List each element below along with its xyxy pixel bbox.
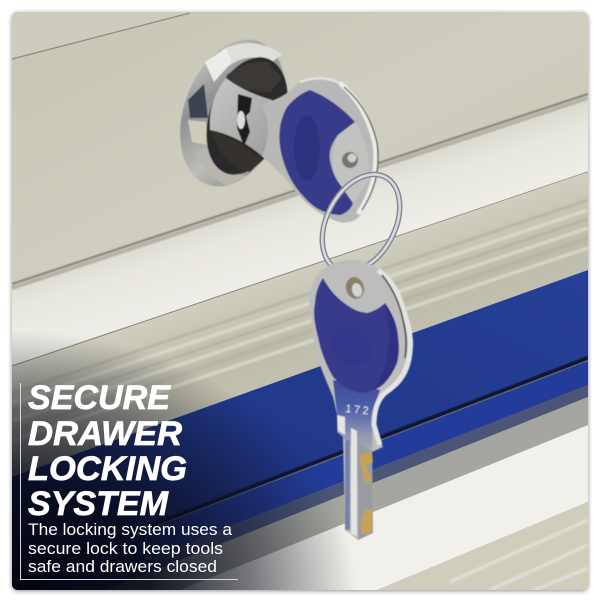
- description: [28, 521, 233, 576]
- description: safe and drawers closed: [28, 558, 217, 576]
- upper drawer front: [12, 12, 588, 302]
- dark text backdrop: [12, 330, 357, 590]
- ridged handle band: [12, 172, 588, 480]
- drawer white rail: [12, 94, 588, 368]
- lock cylinder: [161, 25, 305, 201]
- key on the lock: [262, 78, 379, 223]
- key ring: [307, 161, 415, 285]
- description: The locking system uses a: [28, 521, 233, 539]
- lower drawer front: [144, 385, 588, 590]
- description: secure lock to keep tools: [28, 540, 223, 558]
- heading: LOCKING: [28, 450, 187, 488]
- key number: 172: [345, 403, 372, 418]
- text frame lines: [20, 383, 238, 580]
- heading: SECURE: [28, 379, 171, 417]
- blue drawer strip: [12, 270, 588, 595]
- heading: [28, 379, 187, 523]
- heading: SYSTEM: [28, 485, 169, 523]
- hanging key: [309, 260, 413, 540]
- heading: DRAWER: [28, 415, 182, 453]
